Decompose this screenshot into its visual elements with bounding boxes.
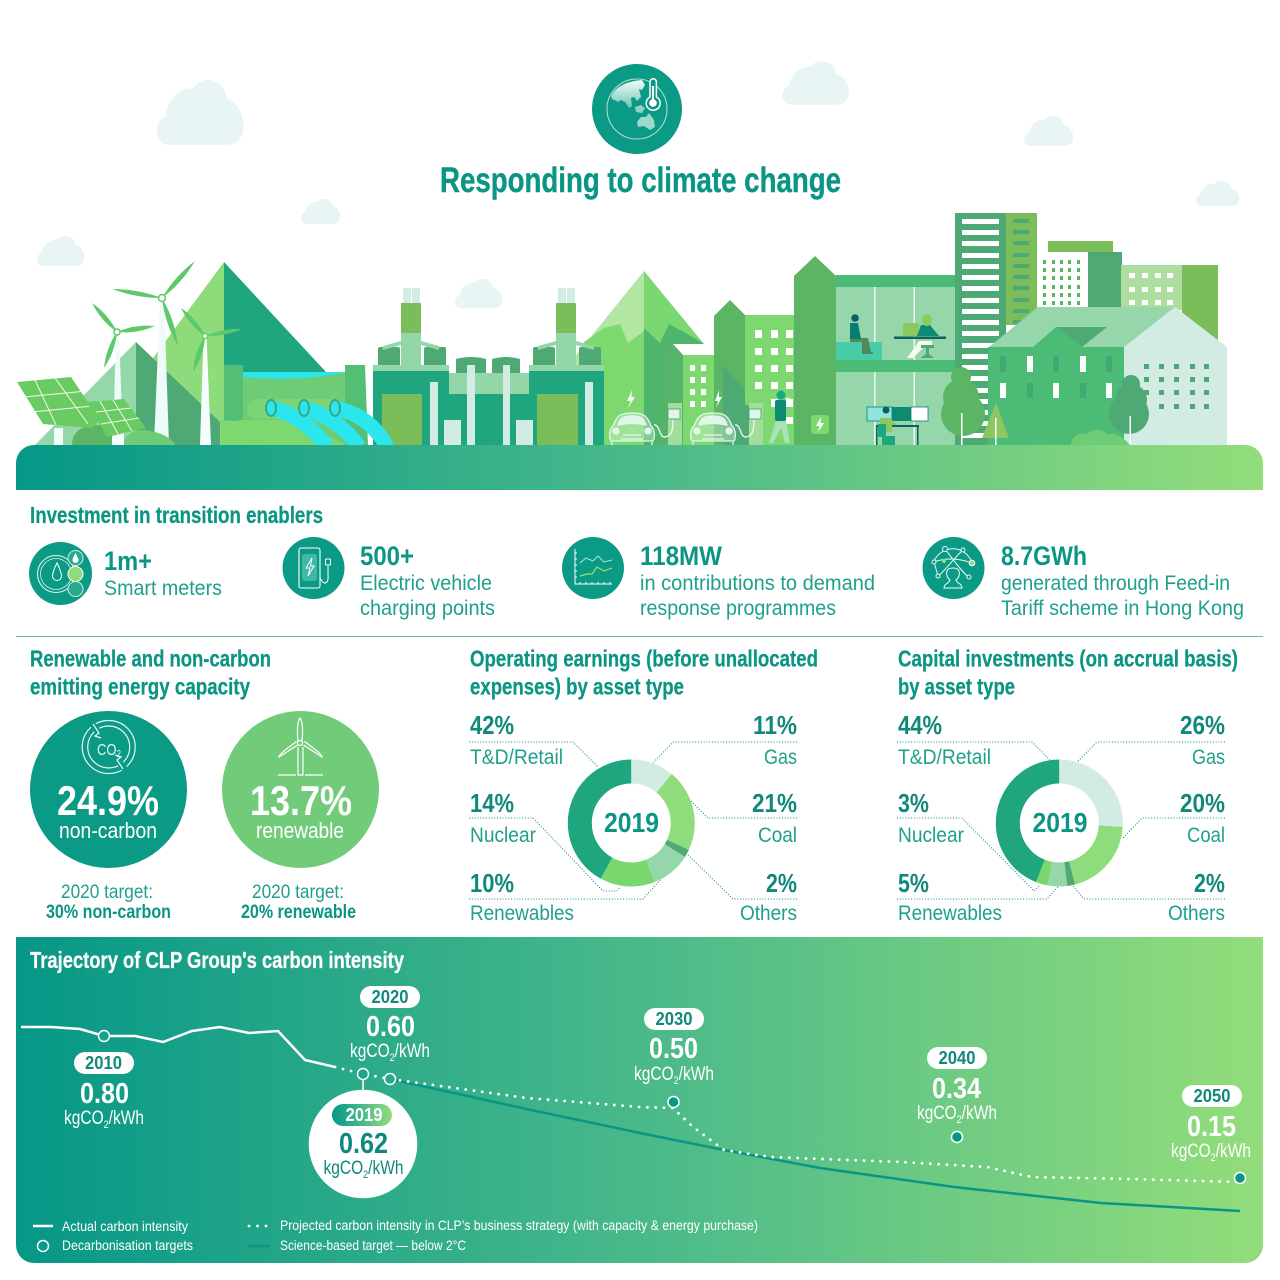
heading [470,646,818,700]
label: Others: 2% [1194,868,1225,898]
callout: 2010: 0.80 [80,1078,129,1110]
target: renewable [241,882,356,923]
callout: 2019 bubble: /kWh [368,1158,404,1179]
cloud: top left [157,80,243,145]
callout: 2010: kgCO [64,1108,113,1129]
callout: 2030: 2 [674,1075,679,1087]
label: Nuclear: Nuclear [898,824,964,847]
callout: 2020: 2020 [372,987,408,1007]
label: Nuclear [898,788,964,847]
icon: EV charger [282,537,344,599]
donut year: 2019 [604,807,659,838]
label: Nuclear: 3% [898,788,929,818]
callout: 2040: kgCO [917,1103,966,1124]
label: Renewables: Renewables [898,902,1002,925]
donut year: 2019 [1032,807,1088,838]
label: Renewables [898,868,1002,925]
donut chart [580,772,683,874]
marker: 2040 [952,1132,962,1142]
callout: 2019 bubble: 2019 [346,1105,382,1125]
callout: 2019 bubble [309,1068,417,1198]
callout: 2050 [1171,1085,1251,1164]
value: 13.7% [250,777,352,824]
legend: Actual carbon intensity [62,1218,188,1234]
stat: 118MW: 118MW [640,541,722,571]
charger 2 [749,403,763,445]
label: generated through feed-in tariff scheme: Tariff scheme in Hong Kong [1001,597,1244,620]
car 2 [691,413,735,445]
label: Renewables: 10% [470,868,514,898]
callout: 2020: /kWh [395,1041,430,1062]
icon: network and person [922,537,984,599]
tower: pentagon block [794,256,836,445]
callout: 2010: 2010 [85,1053,122,1073]
heading: Investment in transition enablers [30,502,323,528]
label: Coal: 21% [752,788,797,818]
label: electric vehicle charging points [360,572,495,620]
target: non-carbon: 30% non-carbon [46,902,171,923]
callout: 2010: /kWh [109,1108,144,1129]
label: Gas [1180,710,1225,769]
heading [30,646,271,700]
heading: emitting energy capacity [30,674,250,700]
cloud: middle left [301,199,340,224]
legend: Decarbonisation targets [62,1237,193,1253]
callout: 2020 [350,986,430,1064]
callout: 2020: kgCO [350,1041,399,1062]
building: pale green and olive block [1121,265,1218,340]
icon: smart meter [29,542,92,605]
label: non-carbon [59,818,157,843]
panel heading: Trajectory of CLP Group's carbon intensity [30,947,404,973]
label: Nuclear [470,788,536,847]
callout: 2050: 0.15 [1187,1111,1236,1143]
leader lines [897,742,1225,899]
label: T&D/Retail: 44% [898,710,942,740]
label: contributions to demand response programmes: in contributions to demand [640,572,875,595]
marker: 2020 [384,1074,396,1084]
mountain: small pyramid [35,342,220,445]
callout: 2030: 0.50 [649,1033,698,1065]
label: Gas [753,710,797,769]
callout: 2020: 2 [390,1052,395,1064]
line: science-based target [390,1079,1240,1211]
label: T&D/Retail [898,710,991,769]
label: Renewables [470,868,574,925]
legend: Science-based target — below 2°C [280,1237,466,1253]
building: mid-rise block [714,300,803,445]
person at computer with monitors [867,406,928,445]
stat: 1m+: 1m+ [104,546,152,576]
label: Coal: Coal [758,824,797,847]
cloud: far left [37,236,84,266]
icon: globe and thermometer [592,64,682,154]
line: projected carbon intensity [335,1067,1240,1182]
label: Coal [752,788,797,847]
label: contributions to demand response programmes: response programmes [640,597,836,620]
callout: 2019 bubble: 2 [363,1169,368,1181]
mountain: large pyramid [122,262,326,445]
label: Renewables: 5% [898,868,929,898]
label: Others [1168,868,1225,925]
marker: 2010 [98,1030,110,1042]
label: electric vehicle charging points: charging points [360,597,495,620]
target: non-carbon [46,882,171,923]
charger 1 [668,403,682,445]
house with pitched roof [988,307,1227,445]
person sitting with phone [850,314,873,354]
label: T&D/Retail: T&D/Retail [470,746,563,769]
icon: charging tile [811,415,829,434]
section: investment in transition enablers [29,502,1244,620]
car 1 [610,413,654,445]
label: Gas: Gas [1192,746,1225,769]
label: Others: Others [740,902,797,925]
label: contributions to demand response programmes [640,572,875,620]
callout: 2040: /kWh [962,1103,997,1124]
label: Coal: 20% [1180,788,1225,818]
target: renewable: 2020 target: [252,882,344,903]
target: renewable: 20% renewable [241,902,356,923]
person with phone [769,390,790,443]
solar panels [17,377,175,445]
enabler: EV charging points [282,537,495,620]
heading: Operating earnings (before unallocated [470,646,818,672]
callout: 2040: 2 [957,1114,962,1126]
legend: Projected carbon intensity in CLP’s business strategy (with capacity & energy purchase) [280,1217,758,1233]
callout: 2010: 2 [104,1119,109,1131]
legend [33,1217,758,1253]
label: generated through feed-in tariff scheme [1001,572,1244,620]
enabler: demand response [562,537,875,620]
label: Nuclear: 14% [470,788,514,818]
line: actual carbon intensity [21,1027,335,1067]
callout: 2010 [64,1052,144,1131]
woman at desk with monitor [894,314,946,358]
callout: 2030: /kWh [679,1064,714,1085]
callout: 2030 [634,1008,714,1087]
icon: line chart [562,537,624,599]
building: tall striped tower [955,213,1037,445]
icon: wind turbine [278,718,323,775]
value: 24.9% [57,777,159,824]
heading: expenses) by asset type [470,674,684,700]
illustration: landscape with energy infrastructure and city [16,213,1263,490]
label: Nuclear: Nuclear [470,824,536,847]
leader lines [469,742,797,899]
section: operating earnings by asset type [469,646,818,925]
label: Gas: 11% [753,710,797,740]
title: Responding to climate change [440,161,841,200]
callout: 2050: /kWh [1216,1141,1251,1162]
section: renewable and non-carbon capacity [30,646,379,923]
icon: CO2 crossed [82,720,135,774]
label: T&D/Retail: T&D/Retail [898,746,991,769]
hydro dam [221,365,368,445]
label: T&D/Retail: 42% [470,710,514,740]
stat circle: renewable [222,711,379,868]
heading: Renewable and non-carbon [30,646,271,672]
heading [898,646,1238,700]
label: smart meters: Smart meters [104,577,222,600]
label: Coal: Coal [1187,824,1225,847]
label: renewable [256,818,344,843]
electric cars and chargers [610,390,763,445]
label: Coal [1180,788,1225,847]
callout: 2050: 2050 [1194,1086,1230,1106]
label: Gas: Gas [764,746,797,769]
callout: 2020: 0.60 [366,1011,415,1043]
enabler: feed-in tariff [922,537,1244,620]
label: Renewables: Renewables [470,902,574,925]
callout: 2050: 2 [1211,1152,1216,1164]
callout: 2030: 2030 [656,1009,692,1029]
building: small block [661,344,723,445]
section: capital investments by asset type [897,646,1238,925]
label: Others: 2% [766,868,797,898]
hydro water pipes [266,400,387,447]
marker: 2030 [668,1096,679,1108]
icon: CO2 crossed: 2 [116,749,121,760]
power station [373,288,604,445]
heading: by asset type [898,674,1015,700]
callout: 2019 bubble: kgCO [324,1158,372,1179]
stat: 500+: 500+ [360,541,414,571]
cloud: top right [782,61,849,105]
callout: 2040 [917,1047,997,1126]
cloud: behind power station [455,279,502,308]
label: T&D/Retail [470,710,563,769]
office building cross-section [836,275,955,445]
donut chart [1008,772,1111,874]
stat: 8.7GWh: 8.7GWh [1001,541,1087,571]
panel: trajectory of carbon intensity [16,937,1263,1263]
callout: 2040: 2040 [938,1048,976,1068]
mountain: green peak in centre [560,271,704,445]
label: Gas: 26% [1180,710,1225,740]
cloud: far right [1196,181,1239,206]
callout: 2050: kgCO [1171,1141,1220,1162]
marker: 2050 [1234,1172,1246,1184]
ground band [16,445,1263,490]
target: non-carbon: 2020 target: [61,882,153,903]
building: white dotted block [1043,241,1122,308]
callout: 2030: kgCO [634,1064,683,1085]
label: electric vehicle charging points: Electric vehicle [360,572,492,595]
stat circle: non-carbon [30,711,187,868]
enabler: smart meters [29,542,222,605]
wind turbines [92,261,242,445]
label: Others [740,868,797,925]
cloud: right small [1024,116,1073,146]
trees and bush [941,367,1149,445]
callout: 2019 bubble: 0.62 [339,1128,388,1160]
icon: CO2 crossed: CO [97,742,121,759]
callout: 2040: 0.34 [932,1073,981,1105]
label: generated through feed-in tariff scheme: generated through Feed-in [1001,572,1230,595]
label: Others: Others [1168,902,1225,925]
